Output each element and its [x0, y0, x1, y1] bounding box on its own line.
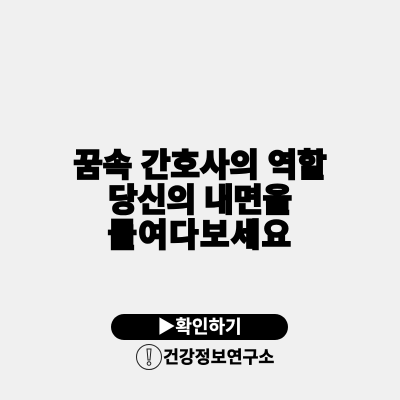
title: 당신의 내면을: [108, 182, 292, 218]
title: [73, 147, 327, 252]
title: 꿈속 간호사의 역할: [73, 147, 327, 183]
button: confirm: ▶확인하기: [157, 317, 242, 337]
title: 들여다보세요: [107, 216, 293, 252]
source label: 건강정보연구소: [163, 347, 274, 367]
icon: exclamation circle: [136, 344, 162, 370]
button: confirm: [111, 314, 288, 340]
